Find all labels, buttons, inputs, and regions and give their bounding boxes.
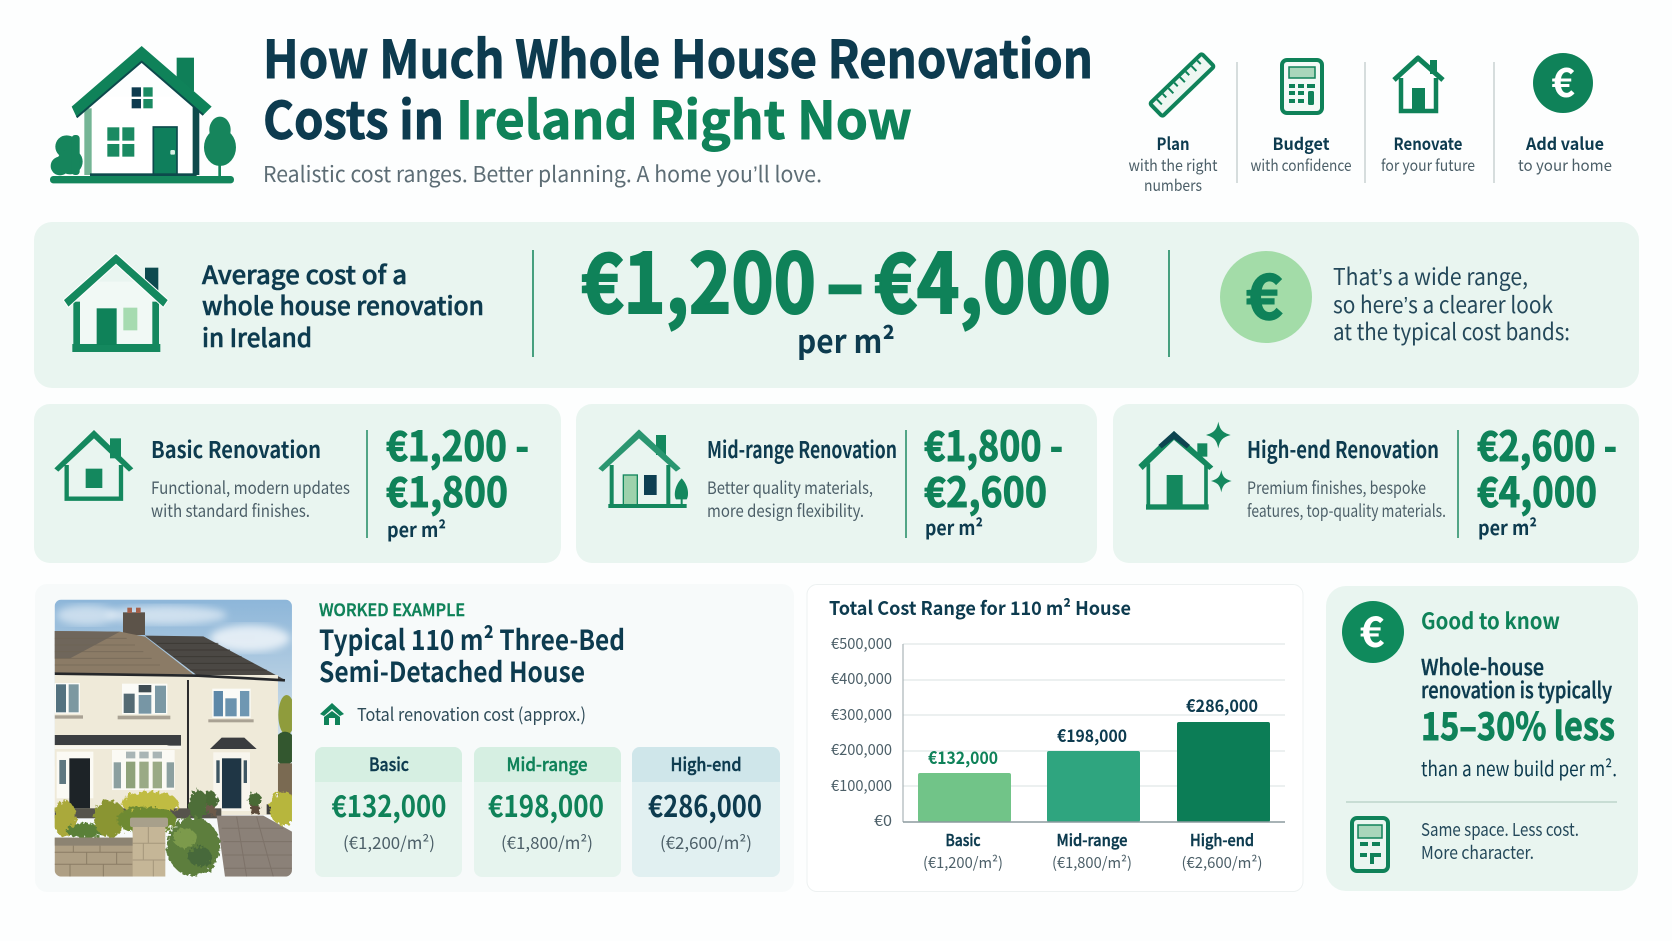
big number range: –	[826, 218, 864, 337]
description: more design flexibility.	[707, 497, 864, 522]
icon: high-end house	[1138, 422, 1232, 510]
bar: basic	[918, 773, 1011, 822]
price	[386, 413, 529, 543]
description: Functional, modern updates	[151, 474, 350, 499]
panel: basic renovation	[34, 404, 561, 563]
chart title: Total Cost Range for 110 m² House	[829, 594, 1131, 621]
icon: euro circle	[1342, 599, 1404, 663]
icon: basic house	[54, 430, 133, 499]
label: plan	[1128, 130, 1218, 196]
label: budget: with confidence	[1250, 152, 1352, 176]
heading: Semi-Detached House	[319, 651, 585, 691]
heading: Good to know	[1421, 604, 1560, 636]
icon: calculator	[1352, 818, 1388, 871]
icon: euro circle	[1533, 51, 1593, 113]
description	[707, 474, 873, 522]
label: add value: to your home	[1518, 152, 1612, 176]
price: per m²	[925, 512, 983, 541]
bar values	[928, 692, 1258, 769]
price: €1,800	[386, 459, 508, 519]
price	[1477, 413, 1617, 541]
bar values: €198,000	[1057, 722, 1127, 747]
cost card: mid-range: €198,000	[488, 782, 604, 826]
cost card: basic	[315, 747, 462, 877]
label: plan: with the right	[1128, 152, 1218, 176]
text: wide range note	[1333, 258, 1570, 347]
title: How Much Whole House Renovation	[263, 18, 1093, 93]
description: with standard finishes.	[151, 497, 310, 522]
icon: euro light circle: €	[1246, 247, 1283, 337]
subtitle: Realistic cost ranges. Better planning. A home you’ll love.	[263, 157, 822, 189]
icon: small house	[320, 703, 344, 725]
category labels: (€1,800/m²)	[1052, 852, 1132, 873]
bar: mid-range	[1047, 751, 1140, 822]
price: €2,600 -	[1477, 413, 1617, 473]
category labels: (€2,600/m²)	[1182, 852, 1262, 873]
icon: hero house	[63, 253, 168, 352]
y axis labels: €200,000	[831, 739, 892, 760]
category labels: (€1,200/m²)	[923, 852, 1003, 873]
y axis labels: €500,000	[831, 633, 892, 654]
label: Total renovation cost (approx.)	[357, 701, 586, 727]
panel: worked example	[54, 600, 780, 877]
price: per m²	[1478, 512, 1537, 541]
panel: mid-range renovation	[576, 404, 1097, 563]
note: More character.	[1421, 839, 1534, 865]
per square metre: per m²	[797, 317, 895, 363]
price: €4,000	[1477, 459, 1597, 519]
heading: Basic Renovation	[151, 431, 321, 465]
text: wide range note: so here’s a clearer look	[1333, 286, 1553, 320]
label: renovate: for your future	[1381, 152, 1475, 176]
panel: bar chart	[807, 584, 1303, 892]
panel: good to know	[1326, 586, 1638, 891]
label: budget	[1250, 130, 1352, 176]
text: average cost label: Average cost of a	[202, 256, 407, 292]
cost card: basic: Basic	[369, 751, 409, 777]
cost card: basic: €132,000	[332, 782, 446, 826]
category labels: Mid-range	[1056, 827, 1128, 851]
upstairs windows	[55, 683, 254, 722]
cost card: mid-range: (€1,800/m²)	[501, 829, 593, 854]
heading: High-end Renovation	[1247, 431, 1439, 465]
eyebrow: WORKED EXAMPLE	[319, 596, 465, 621]
panel: plan budget renovate add value	[1128, 51, 1612, 196]
icon: small house	[1394, 58, 1443, 111]
big number range: €4,000	[874, 218, 1111, 337]
price: €1,800 -	[924, 413, 1063, 473]
statement	[1421, 650, 1612, 705]
icon: main house illustration	[50, 46, 236, 183]
label: add value: Add value	[1525, 130, 1604, 155]
text: average cost label	[202, 256, 484, 355]
title: Ireland Right Now	[456, 79, 912, 154]
heading: Typical 110 m² Three-Bed	[319, 619, 625, 659]
statement: Whole-house	[1421, 650, 1544, 682]
cost card: high-end: €286,000	[648, 782, 762, 826]
heading	[319, 619, 625, 691]
cost card: high-end: High-end	[670, 751, 742, 777]
cost card: basic: (€1,200/m²)	[343, 829, 435, 854]
cost card: high-end	[632, 747, 780, 877]
cost card: mid-range	[474, 747, 621, 877]
statement: renovation is typically	[1421, 673, 1612, 705]
description: features, top-quality materials.	[1247, 497, 1446, 522]
icon: euro circle: €	[1551, 51, 1575, 109]
bar values: €286,000	[1186, 692, 1258, 717]
icon: calculator	[1282, 60, 1322, 113]
label: add value	[1518, 130, 1612, 176]
y axis labels: €100,000	[831, 775, 892, 796]
icon: euro light circle	[1220, 247, 1312, 343]
y axis labels	[831, 633, 892, 831]
label: plan: numbers	[1144, 172, 1202, 196]
y axis labels: €0	[874, 810, 892, 831]
highlight: 15–30% less	[1421, 696, 1615, 751]
label: plan: Plan	[1156, 130, 1190, 155]
label: renovate	[1381, 130, 1475, 176]
price	[924, 413, 1063, 541]
comparison: than a new build per m².	[1421, 753, 1617, 782]
price: €2,600	[924, 459, 1047, 519]
foliage	[54, 790, 297, 876]
category labels: Basic	[946, 827, 980, 851]
category labels	[923, 827, 1262, 873]
title	[263, 18, 1093, 154]
cost card: high-end: (€2,600/m²)	[660, 829, 752, 854]
text: wide range note: at the typical cost bands:	[1333, 313, 1570, 347]
note: Same space. Less cost.	[1421, 816, 1579, 842]
label: renovate: Renovate	[1394, 130, 1463, 155]
category labels: High-end	[1190, 827, 1254, 851]
description: Better quality materials,	[707, 474, 873, 499]
panel: average cost hero	[34, 218, 1639, 388]
price: per m²	[387, 514, 446, 543]
y axis labels: €400,000	[831, 668, 892, 689]
bar: high-end	[1177, 722, 1270, 822]
photo: semi-detached house	[54, 600, 297, 877]
panel: high-end renovation	[1113, 404, 1639, 563]
icon: euro circle: €	[1360, 599, 1385, 660]
price: €1,200 -	[386, 413, 529, 473]
text: average cost label: in Ireland	[202, 319, 312, 355]
text: wide range note: That’s a wide range,	[1333, 258, 1528, 292]
heading: Mid-range Renovation	[707, 431, 897, 465]
icon: ruler	[1150, 54, 1214, 116]
icon: mid-range house	[598, 429, 688, 508]
y axis labels: €300,000	[831, 704, 892, 725]
description	[1247, 474, 1446, 522]
label: budget: Budget	[1272, 130, 1330, 155]
text: average cost label: whole house renovation	[202, 287, 484, 323]
description	[151, 474, 350, 522]
big number range	[581, 218, 1111, 337]
big number range: €1,200	[581, 218, 816, 337]
description: Premium finishes, bespoke	[1247, 474, 1426, 499]
title: Costs in	[263, 79, 444, 154]
cost card: mid-range: Mid-range	[506, 751, 588, 777]
bar values: €132,000	[928, 744, 998, 769]
note	[1421, 816, 1579, 865]
